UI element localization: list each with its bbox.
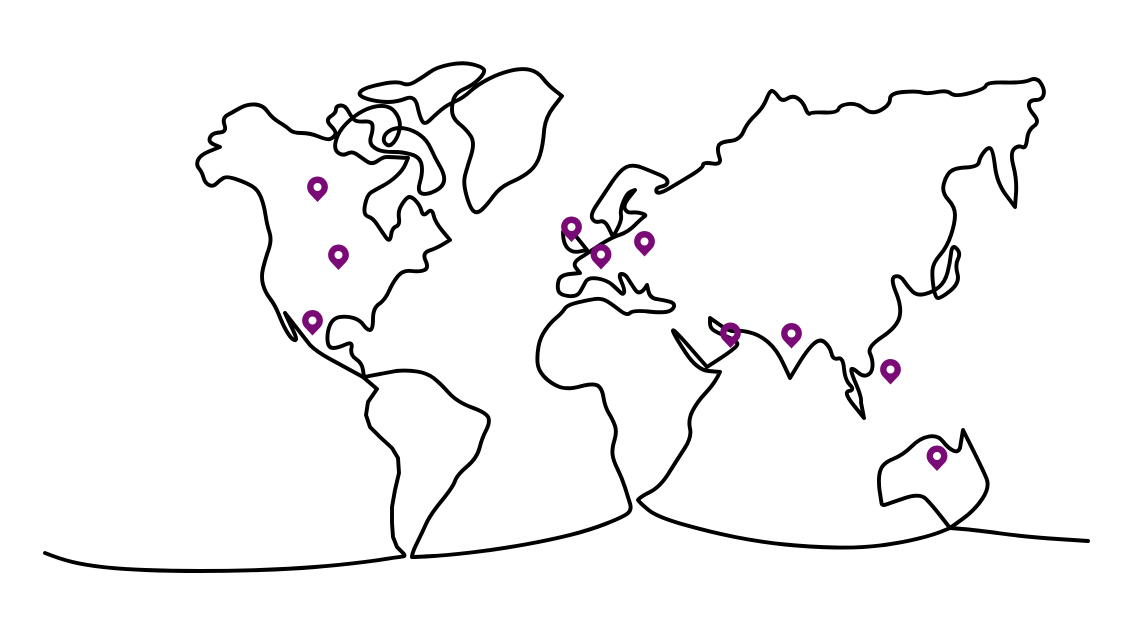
pin: Canada — [307, 177, 328, 202]
pin: Philippines — [880, 359, 901, 384]
line: Australia and trailing baseline — [879, 430, 1088, 541]
pin: Australia — [927, 446, 947, 471]
pin: Poland — [634, 231, 655, 256]
line: Africa — [537, 299, 674, 514]
pin: United States — [328, 245, 349, 270]
pin: United Kingdom — [561, 217, 582, 242]
line: North America — [197, 104, 450, 377]
line: Europe and Scandinavia — [558, 166, 668, 299]
pin: India — [781, 323, 802, 348]
line: south pacific baseline and west coast of South America — [45, 377, 404, 571]
pin: Mexico — [302, 310, 323, 336]
line: Arctic islands and Greenland — [360, 63, 562, 212]
line: east coast of South America and south Atlantic arc — [364, 371, 628, 557]
line: Asia and Indian Ocean arc — [638, 79, 1044, 548]
pin: United Arab Emirates — [720, 323, 741, 348]
pin: France — [591, 244, 611, 270]
line: United Kingdom loop — [563, 232, 587, 252]
